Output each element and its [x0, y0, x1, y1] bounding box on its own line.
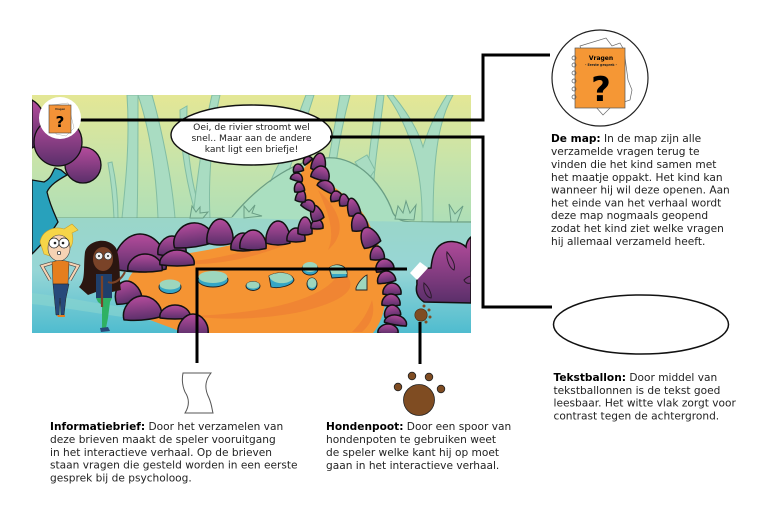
grass	[190, 201, 463, 222]
background trees	[108, 95, 453, 222]
text block: de map: het einde van het verhaal wordt	[551, 198, 721, 210]
text block: informatiebrief: deze brieven maakt de speler vooruitgang	[50, 434, 276, 446]
speech balloon in scene	[171, 105, 332, 165]
text block: informatiebrief: in het interactieve verhaal. Op de brieven	[50, 447, 272, 459]
purple bush	[416, 237, 471, 303]
speech balloon in scene: kant ligt een briefje!	[205, 144, 298, 155]
text block: hondenpoot	[326, 421, 511, 472]
text block: hondenpoot: gaan in het interactieve verhaal.	[326, 460, 499, 472]
purple rocks	[111, 152, 408, 336]
text block: tekstballon: Tekstballon: Door middel van	[554, 372, 717, 384]
girl character	[79, 241, 125, 332]
text block: hondenpoot: de speler welke kant hij op moet	[326, 447, 499, 459]
text block: tekstballon: leesbaar. Het witte vlak zorgt voor	[554, 398, 737, 410]
small map icon in scene: ?	[56, 113, 64, 131]
small map icon in scene	[39, 97, 81, 139]
stepping stones	[159, 262, 367, 294]
letter on ground	[410, 262, 428, 280]
text block: de map: het maatje oppakt. Het kind kan	[551, 172, 723, 184]
text block: tekstballon: tekstballonnen is de tekst goed	[554, 385, 720, 397]
hill	[232, 158, 402, 222]
sky background	[32, 95, 471, 230]
speech balloon in scene: snel.. Maar aan de andere	[191, 133, 312, 144]
text block: de map: wanneer hij wil deze openen. Aan	[551, 184, 730, 196]
text block: informatiebrief: staan vragen die gesteld worden in een eerste	[50, 460, 298, 472]
connector lines	[80, 55, 552, 364]
text block: hondenpoot: Hondenpoot: Door een spoor van	[326, 421, 511, 433]
paw print trail	[415, 304, 432, 324]
text block: de map: vinden die het kind samen met	[551, 159, 716, 171]
map icon: - Eerste gesprek -	[585, 63, 618, 67]
text block: de map: hij allemaal verzameld heeft.	[551, 236, 705, 248]
text block: informatiebrief: Informatiebrief: Door het verzamelen van	[50, 421, 283, 433]
small map icon in scene: Vragen	[55, 107, 65, 111]
water	[32, 218, 471, 333]
text block: de map	[551, 133, 730, 248]
game scene	[32, 95, 471, 336]
paw icon	[394, 372, 445, 416]
text block: de map: De map: In de map zijn alle	[551, 133, 701, 145]
text block: tekstballon	[554, 372, 737, 422]
text block: informatiebrief	[50, 421, 298, 484]
letter icon	[182, 373, 213, 413]
tree and purple canopy	[32, 100, 101, 254]
text block: de map: zodat het kind ziet welke vragen	[551, 223, 724, 235]
speech balloon in scene: Oei, de rivier stroomt wel	[193, 122, 310, 133]
text block: de map: verzamelde vragen terug te	[551, 146, 700, 158]
map icon: ?	[591, 70, 611, 110]
empty speech balloon sample	[554, 295, 728, 354]
text block: de map: deze map nogmaals geopend	[551, 210, 708, 222]
text block: informatiebrief: gesprek bij de psycholoog.	[50, 472, 192, 484]
orange path	[127, 160, 387, 333]
map icon: Vragen	[589, 55, 613, 62]
text block: hondenpoot: hondenpoten te gebruiken weet	[326, 434, 496, 446]
boy character	[40, 224, 78, 317]
map icon	[552, 30, 648, 126]
text block: tekstballon: contrast tegen de achtergrond.	[554, 410, 719, 422]
